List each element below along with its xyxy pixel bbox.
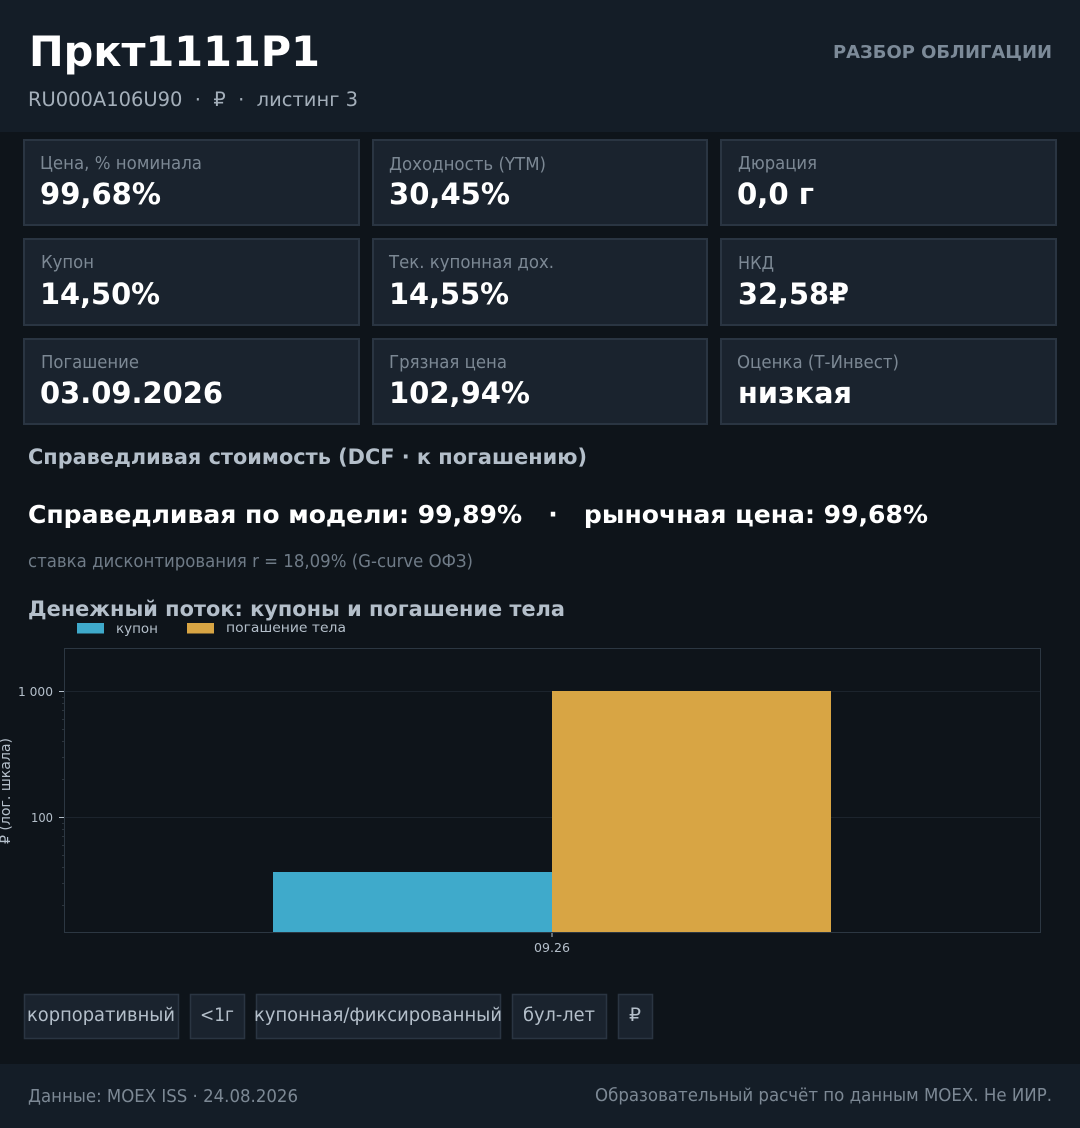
tag: type bbox=[24, 994, 178, 1038]
card: price bbox=[24, 140, 359, 225]
footer disclaimer: Образовательный расчёт по данным MOEX. Не ИИР. bbox=[595, 1085, 1052, 1106]
bar: coupon bbox=[273, 872, 552, 932]
tag: structure bbox=[512, 994, 606, 1038]
heading: cash flow: Денежный поток: купоны и погашение тела bbox=[28, 597, 565, 621]
tag: term: <1г bbox=[200, 1005, 234, 1026]
tag: type: корпоративный bbox=[27, 1005, 175, 1026]
card: price: 99,68% bbox=[40, 177, 161, 211]
legend: погашение тела bbox=[226, 620, 346, 636]
tag: currency: ₽ bbox=[629, 1005, 641, 1026]
card: coupon: Купон bbox=[41, 253, 94, 273]
bar chart bbox=[0, 648, 1040, 955]
card: accrued interest bbox=[721, 239, 1056, 325]
card: coupon: 14,50% bbox=[40, 277, 160, 311]
card: current yield: Тек. купонная дох. bbox=[388, 253, 554, 273]
header band bbox=[0, 0, 1080, 132]
tag: currency bbox=[618, 994, 652, 1038]
card: rating: Оценка (Т-Инвест) bbox=[737, 353, 899, 373]
card: dirty price bbox=[373, 339, 707, 424]
fair value summary: Справедливая по модели: 99,89% · рыночная цена: 99,68% bbox=[28, 500, 928, 529]
card: maturity bbox=[24, 339, 359, 424]
card: accrued interest: 32,58₽ bbox=[738, 277, 849, 311]
card: yield bbox=[373, 140, 707, 225]
card: maturity: 03.09.2026 bbox=[40, 376, 223, 410]
card: duration bbox=[721, 140, 1056, 225]
card: accrued interest: НКД bbox=[738, 254, 774, 274]
bar: principal bbox=[552, 691, 831, 932]
bar chart: 1 000 bbox=[18, 684, 53, 699]
footer source: Данные: MOEX ISS · 24.08.2026 bbox=[28, 1086, 298, 1107]
card: dirty price: 102,94% bbox=[389, 376, 530, 410]
card: current yield: 14,55% bbox=[389, 277, 509, 311]
card: rating bbox=[721, 339, 1056, 424]
title: Пркт1111Р1 bbox=[29, 27, 320, 76]
heading: fair value: Справедливая стоимость (DCF · к погашению) bbox=[28, 445, 587, 469]
footer band bbox=[0, 1064, 1080, 1128]
legend bbox=[77, 620, 346, 637]
tag: coupon type bbox=[254, 994, 502, 1038]
card: maturity: Погашение bbox=[41, 353, 139, 373]
card: current yield bbox=[373, 239, 707, 325]
tag: term bbox=[190, 994, 244, 1038]
header tag: РАЗБОР ОБЛИГАЦИИ bbox=[833, 42, 1052, 63]
tag: structure: бул-лет bbox=[523, 1005, 595, 1026]
card: price: Цена, % номинала bbox=[40, 154, 202, 174]
discount rate note: ставка дисконтирования r = 18,09% (G-curve ОФЗ) bbox=[28, 551, 473, 572]
card: duration: 0,0 г bbox=[737, 177, 814, 211]
tag: coupon type: купонная/фиксированный bbox=[254, 1005, 502, 1026]
card: yield: Доходность (YTM) bbox=[389, 155, 546, 175]
card: coupon bbox=[24, 239, 359, 325]
card: yield: 30,45% bbox=[389, 177, 510, 211]
bar chart: 09.26 bbox=[534, 940, 570, 955]
card: dirty price: Грязная цена bbox=[389, 353, 507, 373]
card: duration: Дюрация bbox=[738, 154, 817, 174]
subtitle: RU000A106U90 · ₽ · листинг 3 bbox=[28, 88, 358, 111]
card: rating: низкая bbox=[738, 376, 852, 410]
legend: купон bbox=[116, 621, 158, 637]
bar chart: 100 bbox=[31, 810, 53, 825]
